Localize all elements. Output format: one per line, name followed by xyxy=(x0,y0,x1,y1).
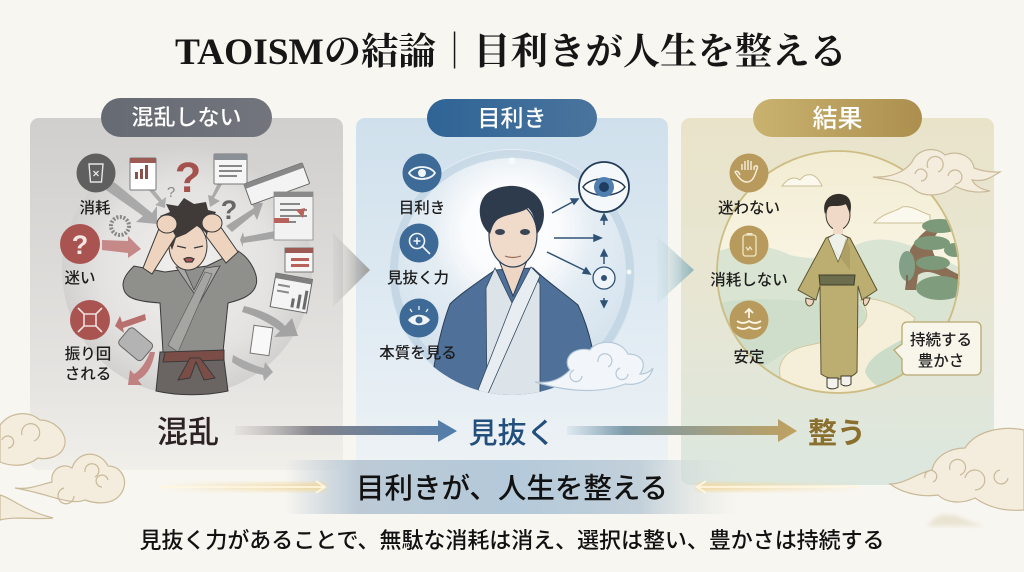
question marks: ? xyxy=(221,195,237,225)
label: 本質を見る: 本質を見る xyxy=(379,344,457,362)
scribble xyxy=(111,217,129,235)
icon: magnifier xyxy=(400,224,438,262)
callout: lasting abundance xyxy=(894,322,981,375)
arrow: confusion to insight xyxy=(235,420,457,442)
label: 振り回 される xyxy=(65,345,111,383)
cloud: result xyxy=(873,150,1000,195)
summary sentence: 見抜く力があることで、無駄な消耗は消え、選択は整い、豊かさは持続する xyxy=(140,528,884,553)
clouds: lower right xyxy=(890,428,1024,526)
tree xyxy=(905,230,960,290)
icon: doubt: ? xyxy=(72,230,88,260)
figure: clear-eyed man xyxy=(430,186,600,400)
panel: insight xyxy=(356,118,668,470)
insight arrows xyxy=(547,199,607,307)
cloud: insight xyxy=(535,342,653,390)
chevron: insight to result xyxy=(657,236,694,304)
icon: battery xyxy=(730,226,768,264)
pill: 目利き xyxy=(427,99,597,137)
clouds in scene xyxy=(782,175,822,186)
bottom band xyxy=(285,460,740,514)
hills xyxy=(718,240,960,377)
icon: doubt xyxy=(60,224,100,264)
label: 迷い: 迷い xyxy=(64,269,96,287)
label: 見抜く力: 見抜く力 xyxy=(387,269,449,287)
arrow: insight to result xyxy=(567,419,797,442)
callout: lasting abundance: 豊かさ xyxy=(918,352,964,370)
icon: stable xyxy=(730,300,768,340)
question marks: ? xyxy=(175,154,201,202)
callout: lasting abundance: 持続する xyxy=(910,331,972,349)
label: 振り回 される: 振り回 xyxy=(65,345,111,363)
illustration circle xyxy=(389,149,635,395)
icon: eye xyxy=(402,154,442,192)
icon: hand xyxy=(730,154,768,192)
label: 安定: 安定 xyxy=(733,348,765,366)
question marks xyxy=(167,154,237,225)
icon: swayed xyxy=(70,300,110,340)
icon: see essence xyxy=(400,298,438,338)
label: 目利き: 目利き xyxy=(399,199,445,217)
label: 消耗: 消耗 xyxy=(79,199,111,217)
pill: 結果: 結果 xyxy=(812,105,863,133)
pill: 混乱しない xyxy=(101,98,272,137)
word: 混乱: 混乱 xyxy=(157,415,219,450)
figure: settled man xyxy=(798,194,877,389)
illustration backdrop circle xyxy=(62,145,312,395)
band message: 目利きが、人生を整える xyxy=(356,473,668,505)
label: 迷わない: 迷わない xyxy=(718,199,780,217)
label: 振り回 される: される xyxy=(65,365,111,383)
label: 消耗しない: 消耗しない xyxy=(710,271,788,289)
title: TAOISMの結論｜目利きが人生を整える xyxy=(175,31,847,73)
figure: confused man xyxy=(123,198,257,395)
pill: 結果 xyxy=(753,99,922,137)
word: 整う: 整う xyxy=(808,417,866,450)
document windows xyxy=(117,154,313,362)
panel: result xyxy=(681,118,1000,485)
small target icon xyxy=(593,267,615,289)
question marks: ? xyxy=(167,184,175,201)
pill: 目利き: 目利き xyxy=(478,105,546,131)
word: 見抜く: 見抜く xyxy=(468,417,556,450)
icon: consumption xyxy=(76,154,116,192)
gold arrow right xyxy=(697,481,860,493)
chevron: confusion to insight xyxy=(333,233,370,307)
landscape scene xyxy=(710,150,966,400)
clouds: lower left xyxy=(0,414,125,520)
ring xyxy=(717,151,959,393)
panel: confusion xyxy=(0,98,1024,553)
pill: 混乱しない: 混乱しない xyxy=(131,105,242,130)
gold arrow left xyxy=(160,481,325,493)
stray arrows and documents xyxy=(60,154,313,395)
large eye icon xyxy=(579,162,629,212)
